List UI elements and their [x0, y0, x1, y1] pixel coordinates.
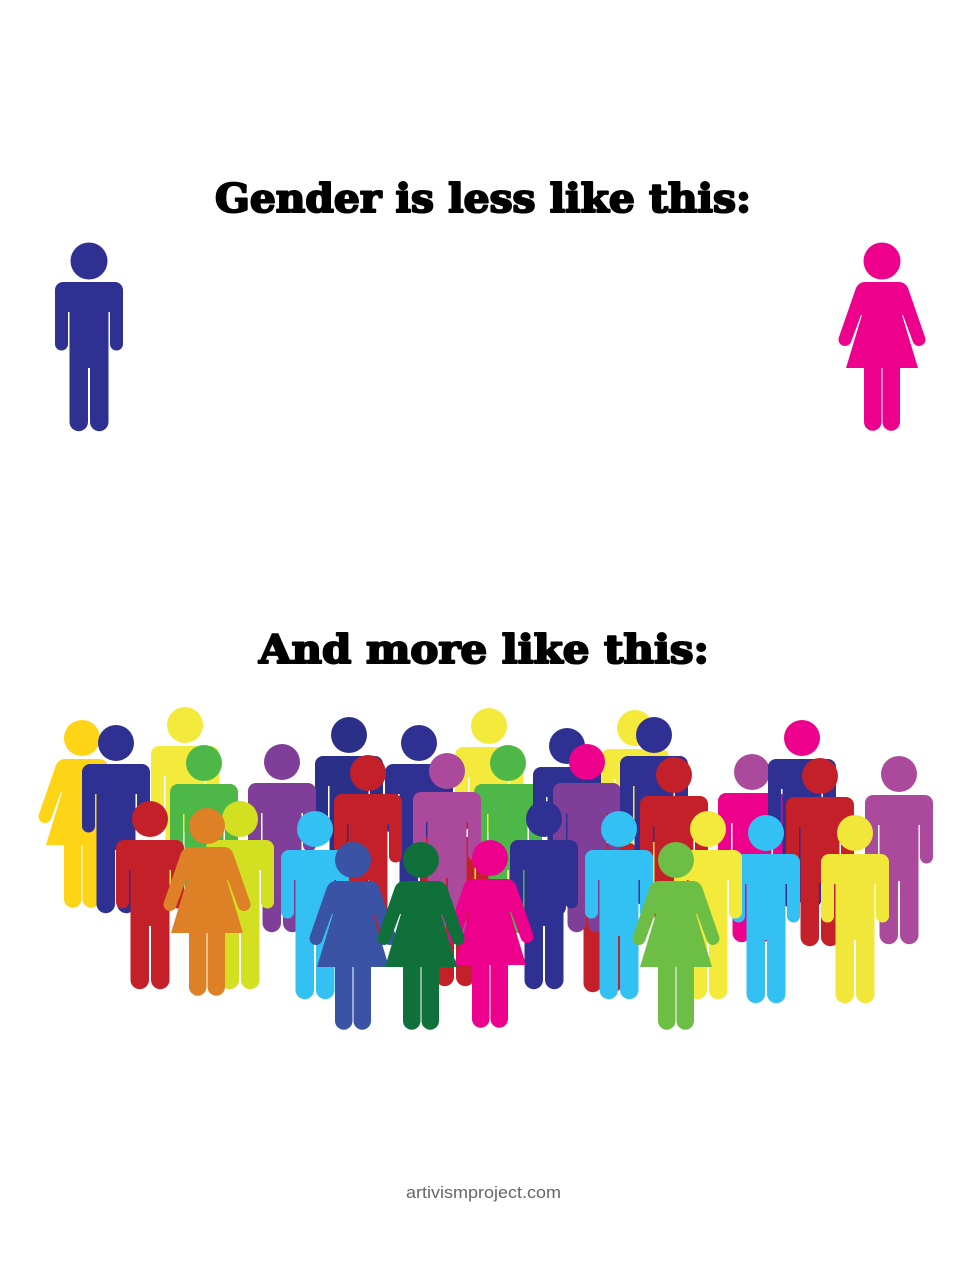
icon: blue man [55, 242, 123, 431]
figure: green man centre [474, 745, 542, 933]
figure: red man right [640, 757, 708, 945]
figure: yellow man far right [821, 815, 889, 1003]
figure: purple man left [248, 744, 316, 932]
figure: navy man centre-right [533, 728, 601, 916]
figure: purple man with pink head [553, 744, 621, 932]
figure: red man front left [116, 801, 184, 989]
figure: navy man centre-left [315, 717, 383, 905]
figure: navy man centre [385, 725, 453, 913]
figure: yellow man centre [455, 708, 523, 896]
footer: website credit: artivismproject.com [406, 1183, 561, 1202]
figure: magenta man far right [865, 756, 933, 944]
figure: yellow man back left [151, 707, 219, 895]
figure: navy man right [620, 717, 688, 905]
figure: red man far right [786, 758, 854, 946]
figure: magenta man centre [413, 753, 481, 941]
heading: and more like this: And more like this: [258, 627, 709, 673]
figure: dark green woman [378, 842, 464, 1030]
figure: pink man with magenta head [718, 754, 786, 942]
figure: cyan man left [281, 811, 349, 999]
figure: green man left [170, 745, 238, 933]
figure: gold woman [39, 720, 126, 908]
figure: pink woman front [446, 840, 534, 1028]
figure: orange woman [164, 808, 251, 996]
title: gender is less like this: Gender is less like this: [215, 176, 751, 222]
figure: cyan man centre [585, 811, 653, 999]
icon: pink woman [838, 242, 926, 431]
figure: navy man with pink head [768, 720, 836, 908]
figure: navy man front [510, 801, 578, 989]
figure: navy man left [82, 725, 150, 913]
figure: light green woman [632, 842, 720, 1030]
figure: hidden red man behind right [569, 804, 637, 992]
figure: cyan man right [732, 815, 800, 1003]
figure: lime man [206, 801, 274, 989]
figure: hidden red man behind centre [421, 798, 489, 986]
figure: yellow man back right [601, 710, 669, 898]
figure: blue woman [310, 842, 396, 1030]
figure: yellow man front [674, 811, 742, 999]
figure: red man centre-left [334, 755, 402, 943]
crowd of multicoloured figures [39, 707, 933, 1030]
